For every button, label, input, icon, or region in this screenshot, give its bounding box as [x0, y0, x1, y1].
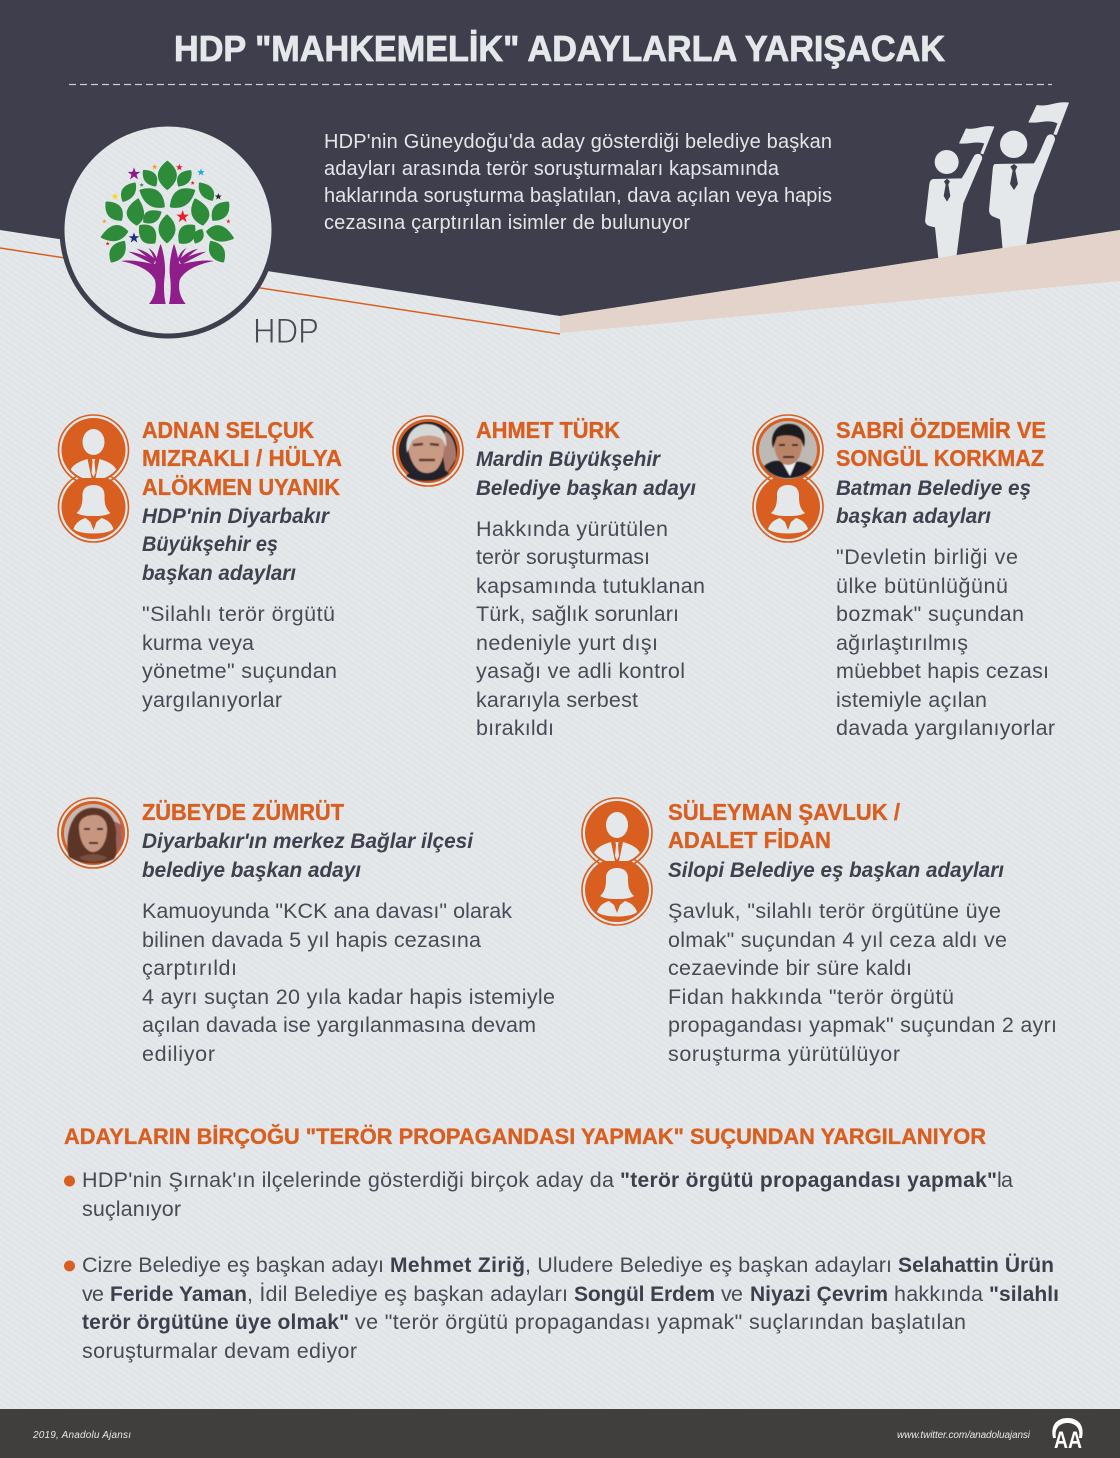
subheading	[836, 477, 1031, 528]
bullet one: la	[997, 1168, 1013, 1192]
intro text: adayları arasında terör soruşturmaları kapsamında	[324, 158, 780, 180]
bullet two: Mehmet Ziriğ	[390, 1254, 525, 1277]
heading	[668, 799, 901, 853]
body text: çarptırıldı	[142, 956, 237, 980]
body text: kurma veya	[142, 631, 254, 655]
avatars: photo and female icon	[753, 415, 823, 542]
body text: yönetme" suçundan	[142, 659, 337, 683]
heading: AHMET TÜRK	[476, 417, 620, 443]
section heading: propaganda charges: ADAYLARIN BİRÇOĞU "TERÖR PROPAGANDASI YAPMAK" SUÇUNDAN YARGILANIYOR	[64, 1124, 986, 1149]
icon: AA logo	[1052, 1418, 1083, 1454]
body text	[668, 899, 1057, 1066]
heading: SONGÜL KORKMAZ	[836, 445, 1044, 471]
orange accent line	[0, 248, 560, 334]
body text: bilinen davada 5 yıl hapis cezasına	[142, 928, 481, 952]
dark header band	[0, 0, 1120, 316]
body text: davada yargılanıyorlar	[836, 716, 1055, 740]
bullet one: HDP'nin Şırnak'ın ilçelerinde gösterdiği birçok aday da	[82, 1168, 614, 1192]
section: Zübeyde Zümrüt	[58, 798, 555, 1066]
subheading: Silopi Belediye eş başkan adayları	[668, 859, 1004, 882]
body text: Hakkında yürütülen	[476, 517, 668, 541]
subheading	[476, 448, 696, 500]
subheading: belediye başkan adayı	[142, 859, 361, 882]
heading	[142, 417, 342, 500]
body text: Kamuoyunda "KCK ana davası" olarak	[142, 899, 512, 923]
heading: MIZRAKLI / HÜLYA	[142, 445, 342, 471]
body text: ediliyor	[142, 1042, 215, 1066]
subheading: Mardin Büyükşehir	[476, 448, 662, 471]
heading: ADNAN SELÇUK	[142, 417, 314, 443]
body text: propagandası yapmak" suçundan 2 ayrı	[668, 1013, 1057, 1037]
subheading	[142, 505, 331, 585]
intro text: HDP'nin Güneydoğu'da aday gösterdiği belediye başkan	[324, 131, 832, 153]
icon: male and female avatars	[58, 415, 128, 542]
body text	[836, 545, 1055, 740]
tree leaves	[102, 162, 233, 261]
bullet two: soruşturmalar devam ediyor	[82, 1339, 357, 1363]
icon: male and female avatars	[582, 798, 652, 925]
subheading: Batman Belediye eş	[836, 477, 1031, 500]
bullet two: hakkında	[894, 1282, 983, 1306]
heading: SÜLEYMAN ŞAVLUK /	[668, 799, 901, 825]
icon: AA logo: AA	[1054, 1427, 1082, 1454]
body text	[142, 899, 555, 1066]
body text	[142, 602, 337, 712]
icon: flag-waving candidates	[925, 102, 1069, 258]
body text: açılan davada ise yargılanmasına devam	[142, 1013, 536, 1037]
body text: 4 ayrı suçtan 20 yıla kadar hapis istemiyle	[142, 985, 555, 1009]
bullet one: "terör örgütü propagandası yapmak"	[620, 1169, 997, 1192]
body text: "Silahlı terör örgütü	[142, 602, 335, 626]
section: Ahmet Türk	[393, 416, 705, 740]
logo caption HDP: HDP	[253, 312, 319, 351]
pink band	[560, 230, 1120, 333]
body text: olmak" suçundan 4 yıl ceza aldı ve	[668, 928, 1007, 952]
heading: SABRİ ÖZDEMİR VE	[836, 417, 1046, 443]
bullet two: Songül Erdem	[574, 1283, 715, 1306]
bullet two: Niyazi Çevrim	[750, 1283, 888, 1306]
heading: ADALET FİDAN	[668, 827, 831, 853]
social link: www.twitter.com/anadoluajansi	[897, 1430, 1031, 1441]
body text: kararıyla serbest	[476, 688, 638, 712]
subheading: Belediye başkan adayı	[476, 477, 696, 500]
body text	[476, 517, 705, 740]
bullet two: , Uludere Belediye eş başkan adayları	[525, 1253, 892, 1277]
intro text	[324, 131, 832, 234]
subheading: Büyükşehir eş	[142, 533, 278, 556]
heading: ZÜBEYDE ZÜMRÜT	[142, 799, 344, 825]
body text: Fidan hakkında "terör örgütü	[668, 985, 954, 1009]
intro text: cezasına çarptırılan isimler de bulunuyor	[324, 212, 690, 234]
body text: "Devletin birliği ve	[836, 545, 1018, 569]
bullet two: Feride Yaman	[110, 1283, 247, 1306]
body text: müebbet hapis cezası	[836, 659, 1049, 683]
body text: bozmak" suçundan	[836, 602, 1024, 626]
HDP logo	[60, 122, 276, 338]
subheading: Diyarbakır'ın merkez Bağlar ilçesi	[142, 830, 474, 853]
section: Mızraklı and Uyanık	[58, 415, 342, 712]
body text: nedeniyle yurt dışı	[476, 631, 658, 655]
bullet two: ve	[82, 1282, 104, 1306]
bullet two: Selahattin Ürün	[898, 1254, 1054, 1277]
body text: terör soruşturması	[476, 545, 650, 569]
bullet one: suçlanıyor	[82, 1197, 181, 1221]
copyright: 2019, Anadolu Ajansı	[32, 1430, 131, 1441]
section: Şavluk and Fidan	[582, 798, 1057, 1066]
bullet two: terör örgütüne üye olmak"	[82, 1311, 349, 1334]
body text: yasağı ve adli kontrol	[476, 659, 685, 683]
subheading	[142, 830, 474, 882]
body text: bırakıldı	[476, 716, 554, 740]
photo: Zübeyde Zümrüt	[58, 798, 128, 868]
photo: Ahmet Türk	[393, 416, 463, 486]
intro text: haklarında soruşturma başlatılan, dava açılan veya hapis	[324, 185, 832, 207]
subheading: başkan adayları	[142, 562, 296, 585]
footer bar	[0, 1409, 1120, 1458]
heading: ALÖKMEN UYANIK	[142, 474, 340, 500]
bullet two: , İdil Belediye eş başkan adayları	[247, 1282, 568, 1306]
bullet two: ve	[721, 1282, 743, 1306]
title: HDP "MAHKEMELİK" ADAYLARLA YARIŞACAK	[174, 28, 945, 69]
subheading: başkan adayları	[836, 505, 991, 528]
body text: soruşturma yürütülüyor	[668, 1042, 900, 1066]
bullet two: ve "terör örgütü propagandası yapmak" suçlarından başlatılan	[355, 1310, 966, 1334]
stars	[102, 164, 231, 246]
bullet two: "silahlı	[989, 1283, 1059, 1306]
bullet one	[64, 1168, 1013, 1221]
body text: ağırlaştırılmış	[836, 631, 968, 655]
body text: ülke bütünlüğünü	[836, 574, 1008, 598]
heading	[836, 417, 1046, 471]
subheading: HDP'nin Diyarbakır	[142, 505, 331, 528]
section: Özdemir and Korkmaz	[753, 415, 1055, 740]
bullet two	[64, 1253, 1059, 1363]
body text: istemiyle açılan	[836, 688, 987, 712]
body text: yargılanıyorlar	[142, 688, 282, 712]
bullet two: Cizre Belediye eş başkan adayı	[82, 1253, 384, 1277]
hands	[121, 244, 214, 304]
body text: cezaevinde bir süre kaldı	[668, 956, 912, 980]
body text: Türk, sağlık sorunları	[476, 602, 679, 626]
body text: kapsamında tutuklanan	[476, 574, 705, 598]
body text: Şavluk, "silahlı terör örgütüne üye	[668, 899, 1001, 923]
